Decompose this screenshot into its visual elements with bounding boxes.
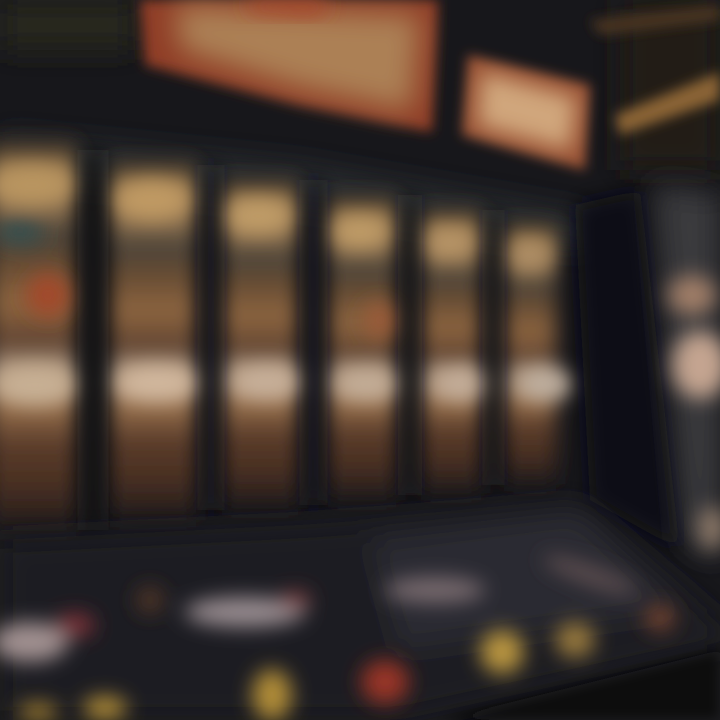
bottom front edge (440, 650, 720, 720)
top dark cabinet (0, 0, 720, 170)
right neighbouring machine (655, 185, 720, 560)
dark dividers between reels (84, 150, 499, 530)
second marquee sign (462, 55, 590, 170)
deck buttons and lights (0, 549, 676, 720)
highlighted bands on reels (0, 165, 573, 405)
top marquee sign (140, 0, 438, 132)
right golden light beams (590, 5, 720, 135)
button deck (0, 505, 720, 720)
right side dark pillar (575, 190, 680, 550)
reel columns (0, 140, 556, 530)
upper cabinet band (0, 135, 590, 250)
